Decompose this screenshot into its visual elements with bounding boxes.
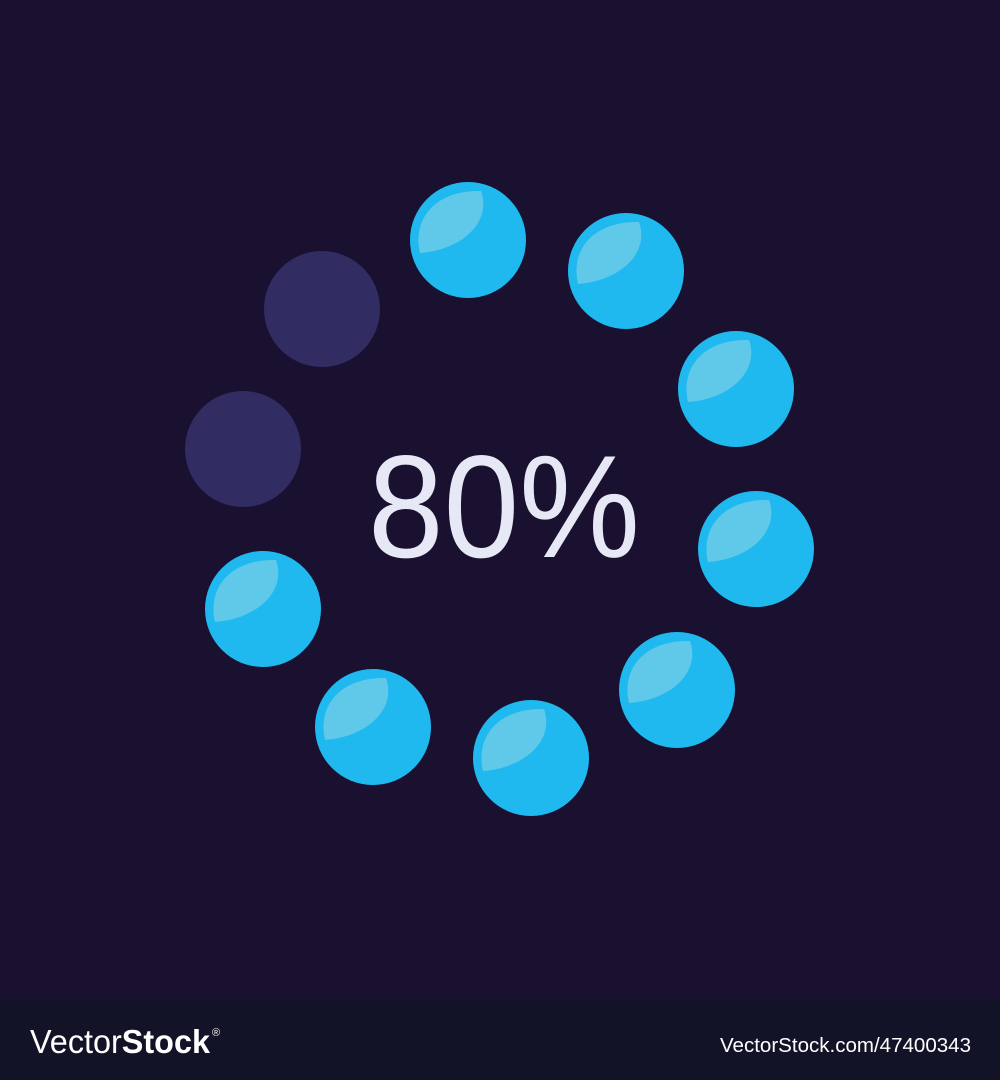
bubble 3: [678, 331, 794, 447]
inactive bubble 10: [264, 251, 380, 367]
bubble 1: [410, 182, 526, 298]
progress ring: [185, 182, 814, 816]
bubble 4: [698, 491, 814, 607]
footer url: VectorStock.com/47400343: [720, 1035, 971, 1057]
footer bar: ®: [212, 1027, 220, 1039]
bubble 5: [619, 632, 735, 748]
bubble 7: [315, 669, 431, 785]
bubble 6: [473, 700, 589, 816]
inactive bubble 9: [185, 391, 301, 507]
footer bar: [0, 1000, 1000, 1080]
percentage label: 80%: [368, 425, 640, 588]
bubble 8: [205, 551, 321, 667]
bubble 2: [568, 213, 684, 329]
footer logo: VectorStock: [30, 1023, 211, 1060]
